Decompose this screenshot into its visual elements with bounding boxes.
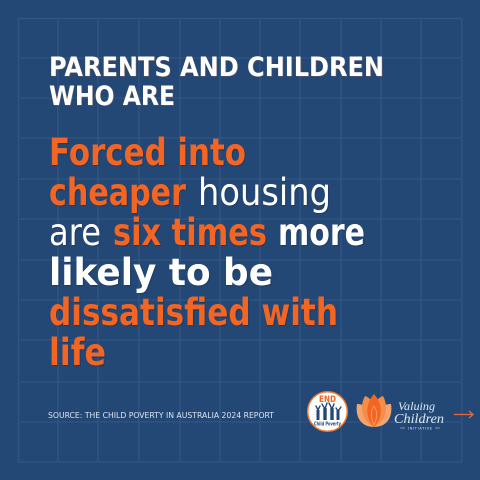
main statement: dissatisfied with [49, 291, 338, 334]
heading: WHO ARE [49, 81, 175, 112]
logo: Valuing Children Initiative: INITIATIVE [408, 426, 432, 430]
main statement: Forced into [49, 131, 246, 174]
main statement: housing [198, 171, 331, 214]
main statement [49, 131, 365, 374]
logo: Valuing Children Initiative: Children [394, 412, 444, 427]
main statement: more [278, 211, 365, 254]
logo: End Child Poverty: END [319, 395, 336, 405]
source line: SOURCE: THE CHILD POVERTY IN AUSTRALIA 2024 REPORT [48, 411, 274, 420]
logo: Valuing Children Initiative: Valuing [398, 399, 435, 413]
main statement: are [49, 211, 101, 254]
main statement: cheaper [49, 171, 187, 214]
heading: PARENTS AND CHILDREN [49, 52, 384, 83]
arrow [454, 411, 473, 418]
logo: End Child Poverty: Child Poverty [314, 422, 342, 428]
logo: lotus flower [357, 394, 391, 427]
main statement: life [49, 331, 106, 374]
main statement: six times [113, 211, 267, 254]
main statement: likely to be [49, 251, 273, 294]
logo: End Child Poverty [308, 392, 347, 431]
heading [49, 52, 384, 112]
logo: Valuing Children Initiative [394, 399, 444, 430]
